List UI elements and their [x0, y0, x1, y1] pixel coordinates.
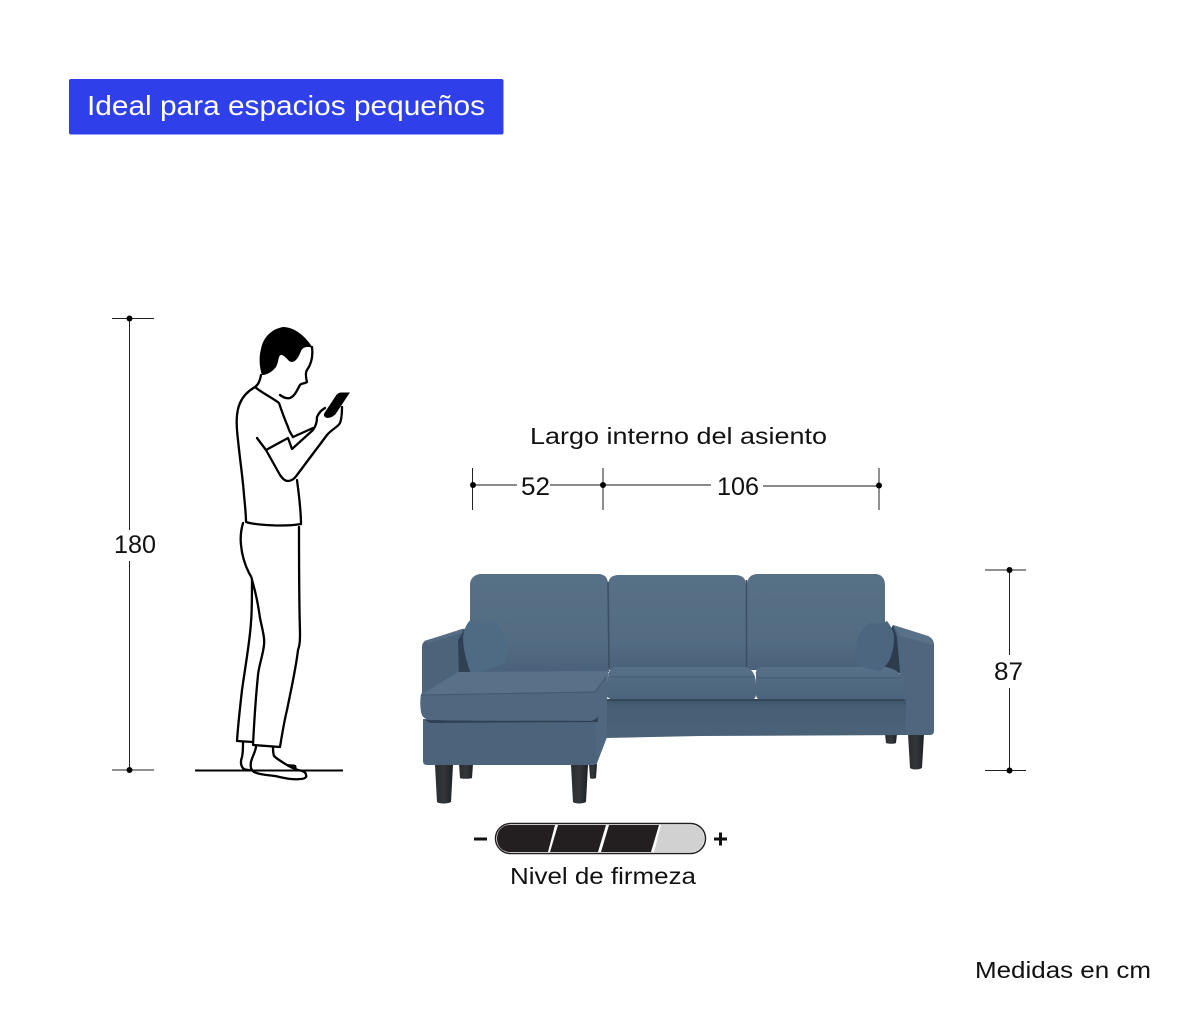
- illustration: person looking at phone: [195, 327, 349, 779]
- dimension: sofa height 87: [985, 567, 1026, 774]
- right seat cushions: [606, 667, 904, 700]
- hair: [260, 327, 313, 375]
- trousers: [237, 523, 300, 747]
- chaise cushion: [420, 671, 608, 721]
- label: Nivel de firmeza: Nivel de firmeza: [510, 863, 697, 889]
- feet: [241, 743, 306, 779]
- illustration: L-shaped sofa: [420, 574, 934, 804]
- plus sign: [714, 832, 727, 846]
- phone: [324, 393, 349, 417]
- empty segment: [654, 825, 704, 852]
- dimension: sofa height 87: 87: [994, 658, 1023, 686]
- dimension: seat widths 52 and 106: 106: [717, 473, 759, 501]
- dimension: seat widths 52 and 106: [470, 468, 882, 510]
- left armrest: [422, 628, 472, 700]
- meter outline: [496, 824, 706, 854]
- torso: [237, 387, 301, 525]
- left pillow: [463, 619, 507, 672]
- heading: Largo interno del asiento: Largo interno del asiento: [530, 423, 827, 449]
- badge: Ideal para espacios pequeños: Ideal para espacios pequeños: [87, 90, 485, 121]
- dimension: person height 180: 180: [114, 531, 156, 559]
- filled segments: [497, 825, 555, 852]
- firmness meter: [474, 824, 727, 854]
- arms: [257, 407, 342, 481]
- dimension: person height 180: [112, 316, 156, 773]
- right pillow: [857, 621, 894, 671]
- face and neck: [255, 347, 312, 398]
- sofa base: [600, 699, 906, 738]
- minus sign: [474, 838, 487, 840]
- right armrest: [880, 625, 905, 673]
- note: Medidas en cm: Medidas en cm: [975, 957, 1151, 983]
- floor line: [195, 770, 343, 772]
- badge: Ideal para espacios pequeños: [69, 79, 504, 134]
- chaise base: [423, 703, 607, 765]
- dimension: seat widths 52 and 106: 52: [521, 473, 550, 501]
- back cushions: [470, 574, 885, 672]
- sofa legs: [435, 734, 924, 804]
